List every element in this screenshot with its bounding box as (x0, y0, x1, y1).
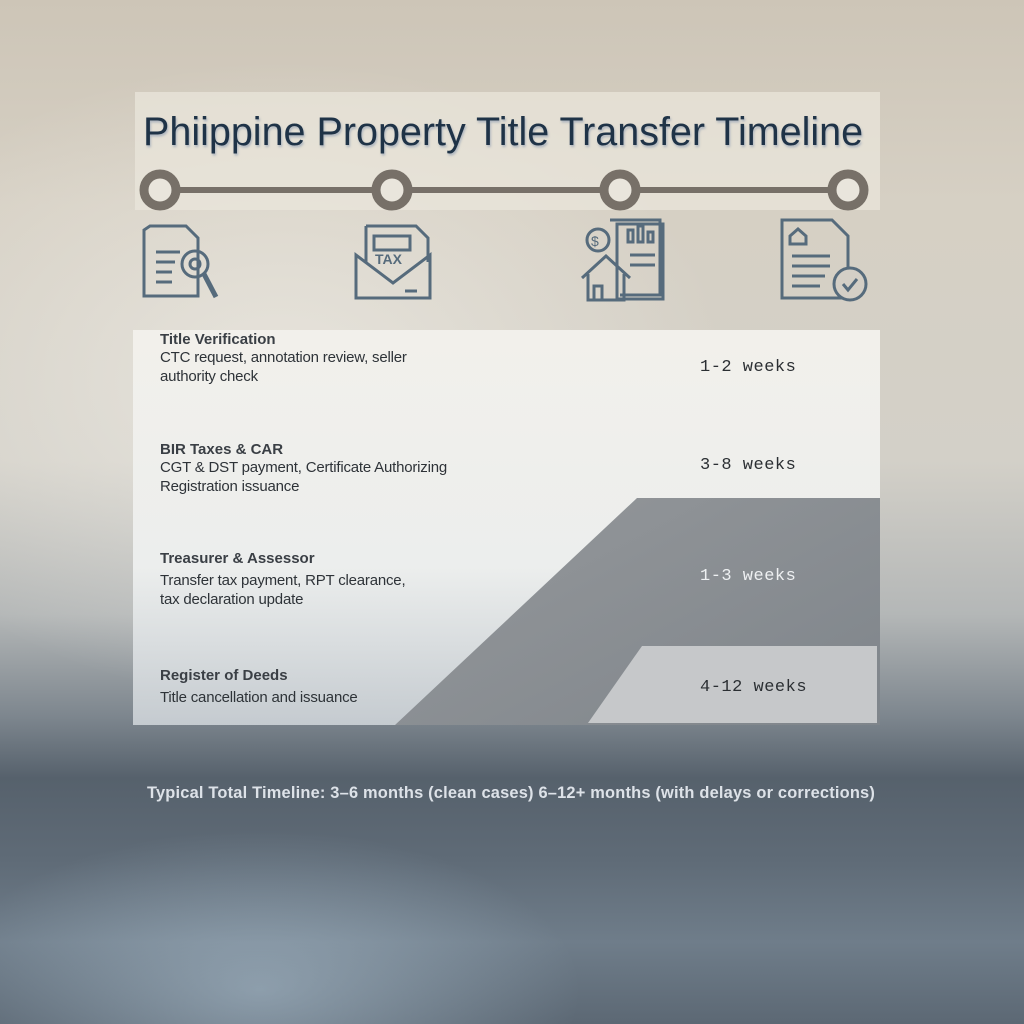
icon: finance house: $ (591, 233, 599, 249)
stage 1: 1-2 weeks (700, 358, 796, 377)
icon: document search (144, 226, 216, 297)
timeline (140, 170, 868, 302)
stage 1: authority check (160, 368, 258, 385)
stage 2: CGT & DST payment, Certificate Authorizing (160, 459, 447, 476)
stage 3: Transfer tax payment, RPT clearance, (160, 572, 405, 589)
title band (135, 92, 880, 210)
stage 3 (160, 550, 796, 608)
stage 3: Treasurer & Assessor (160, 550, 315, 567)
stage 2 (160, 441, 796, 495)
icon: tax envelope: TAX (375, 251, 403, 267)
stage 2: BIR Taxes & CAR (160, 441, 283, 458)
icon: tax envelope (356, 226, 430, 298)
stage 1 (160, 331, 796, 385)
stage 4: 4-12 weeks (700, 678, 807, 697)
icon: finance house (582, 220, 663, 300)
stage 3: tax declaration update (160, 591, 303, 608)
stage 3: 1-3 weeks (700, 567, 796, 586)
footer total: Typical Total Timeline: 3–6 months (clean cases) 6–12+ months (with delays or corrections) (147, 784, 875, 802)
stage 1: CTC request, annotation review, seller (160, 349, 407, 366)
stage 2: Registration issuance (160, 478, 299, 495)
stage 2: 3-8 weeks (700, 456, 796, 475)
stage 1: Title Verification (160, 331, 276, 348)
stage 4: Title cancellation and issuance (160, 689, 358, 706)
title: Phiippine Property Title Transfer Timeline (143, 110, 863, 154)
icon: title document check (782, 220, 866, 300)
stage 4 (160, 667, 807, 706)
stage 4: Register of Deeds (160, 667, 288, 684)
